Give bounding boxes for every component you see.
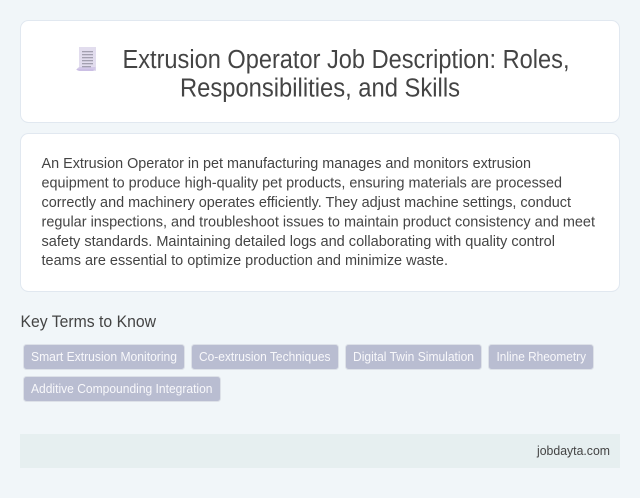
- footer bar: [20, 434, 620, 468]
- text block: description: [42, 156, 595, 269]
- text block: description: teams are essential to optimize production and minimize waste.: [42, 253, 448, 269]
- tag: co-extrusion techniques: Co-extrusion Techniques: [199, 350, 330, 364]
- footer: source: jobdayta.com: [536, 444, 610, 458]
- tag: smart extrusion monitoring: [24, 344, 184, 370]
- title: Responsibilities, and Skills: [180, 74, 460, 102]
- title: [122, 46, 570, 102]
- panel: description card: [20, 134, 620, 292]
- text block: description: safety standards. Maintaining detailed logs and collaborating with quality control: [42, 234, 555, 250]
- tag list: key terms: [24, 344, 594, 402]
- text block: description: correctly and machinery operates efficiently. They adjust machine settings, conduct: [42, 195, 571, 211]
- icon: document scroll: [76, 47, 96, 71]
- tag: digital twin simulation: [346, 344, 482, 370]
- text block: description: regular inspections, and troubleshoot issues to maintain product consistency and meet: [42, 214, 595, 230]
- tag: digital twin simulation: Digital Twin Simulation: [353, 350, 474, 364]
- tag: co-extrusion techniques: [192, 344, 338, 370]
- panel: title card: [20, 20, 620, 122]
- tag: inline rheometry: [488, 344, 594, 370]
- tag: additive compounding integration: [24, 376, 220, 402]
- heading: key terms: Key Terms to Know: [20, 313, 156, 331]
- text block: description: An Extrusion Operator in pet manufacturing manages and monitors extrusion: [42, 156, 531, 172]
- tag: inline rheometry: Inline Rheometry: [496, 350, 587, 364]
- title: Extrusion Operator Job Description: Roles,: [122, 46, 570, 74]
- tag: smart extrusion monitoring: Smart Extrusion Monitoring: [31, 350, 177, 364]
- text block: description: equipment to produce high-quality pet products, ensuring materials are processed: [42, 176, 562, 192]
- tag: additive compounding integration: Additive Compounding Integration: [31, 382, 213, 396]
